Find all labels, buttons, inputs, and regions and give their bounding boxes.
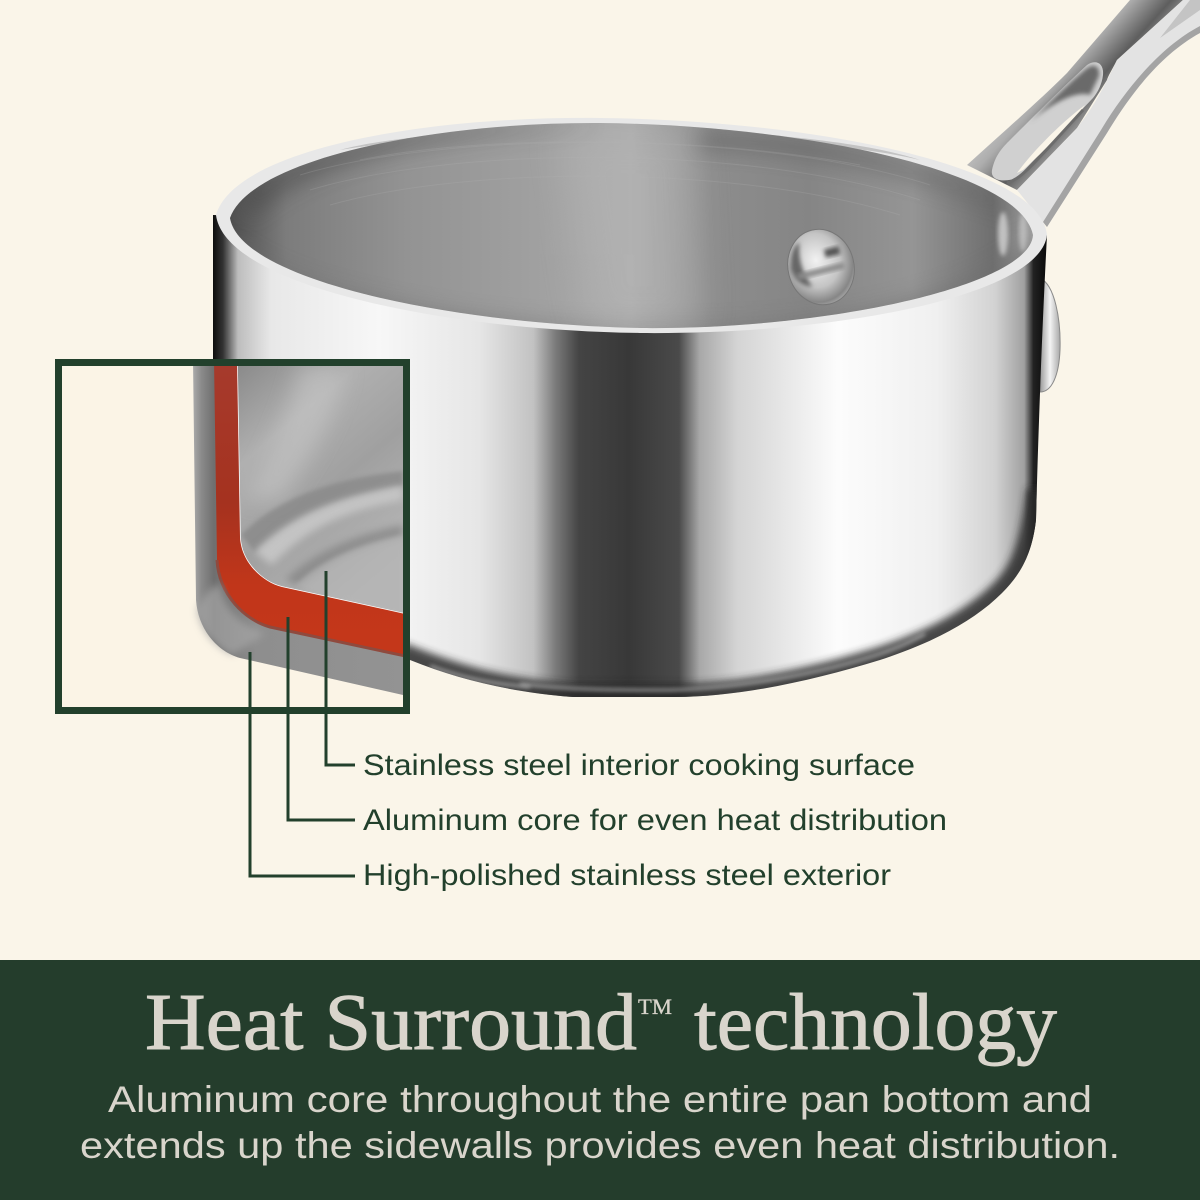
interior stainless surface xyxy=(237,360,410,615)
pan handle xyxy=(967,0,1200,227)
upper handle strip xyxy=(967,0,1183,190)
exterior rivet xyxy=(1040,278,1060,392)
banner text line 1: Aluminum core throughout the entire pan bottom and xyxy=(108,1079,1092,1120)
leader line: exterior xyxy=(250,652,355,876)
banner heading: Heat Surround xyxy=(145,979,637,1067)
banner heading xyxy=(145,979,1057,1067)
outer stainless layer xyxy=(193,360,410,700)
pan body xyxy=(200,200,1060,710)
banner text line 2: extends up the sidewalls provides even heat distribution. xyxy=(80,1125,1120,1166)
pan interior xyxy=(225,118,1040,335)
leader line: interior xyxy=(326,571,355,765)
banner heading: TM xyxy=(638,994,672,1019)
handle eyelet xyxy=(992,62,1103,180)
polished handle band xyxy=(1017,0,1200,227)
inset background fill xyxy=(62,366,403,707)
label: interior: Stainless steel interior cooking surface xyxy=(363,749,915,782)
white edge line xyxy=(237,360,410,615)
label: exterior: High-polished stainless steel exterior xyxy=(363,859,891,892)
leader line: core xyxy=(288,617,355,820)
bottom banner xyxy=(0,960,1200,1200)
inset frame xyxy=(58,362,406,710)
banner heading: technology xyxy=(694,979,1057,1067)
pan illustration xyxy=(200,0,1200,710)
corner highlight xyxy=(197,585,265,655)
cross-section inset xyxy=(58,360,410,710)
label: core: Aluminum core for even heat distribution xyxy=(363,804,947,837)
pan rim xyxy=(216,118,1047,333)
interior rivet xyxy=(780,222,862,312)
red aluminum core xyxy=(214,360,410,657)
